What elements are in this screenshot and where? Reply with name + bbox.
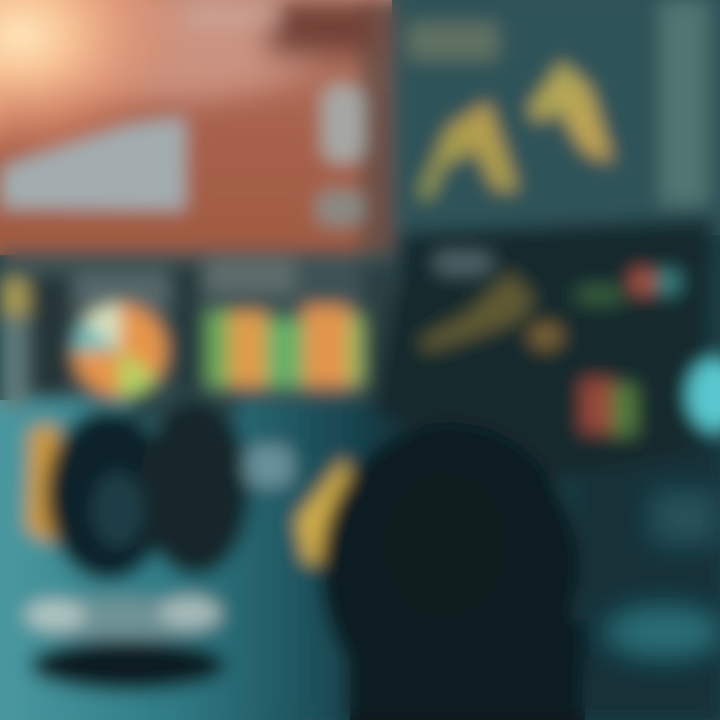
pie chart <box>74 304 166 396</box>
camera body right <box>575 445 720 720</box>
wall line chart <box>408 0 708 205</box>
wall blobs <box>316 85 364 226</box>
monitor panels <box>0 258 392 408</box>
laptop <box>372 218 712 480</box>
left small camera <box>26 392 293 581</box>
big camera lens <box>296 422 585 720</box>
laptop screen charts <box>420 252 681 435</box>
left lens disc <box>25 597 226 691</box>
camera lens bodies <box>46 400 250 581</box>
window panel <box>0 0 280 210</box>
camera strap <box>26 424 58 545</box>
lens top band <box>130 392 240 422</box>
sunlight glow <box>0 0 380 160</box>
cyan globe <box>688 359 720 431</box>
bar chart <box>208 306 362 386</box>
